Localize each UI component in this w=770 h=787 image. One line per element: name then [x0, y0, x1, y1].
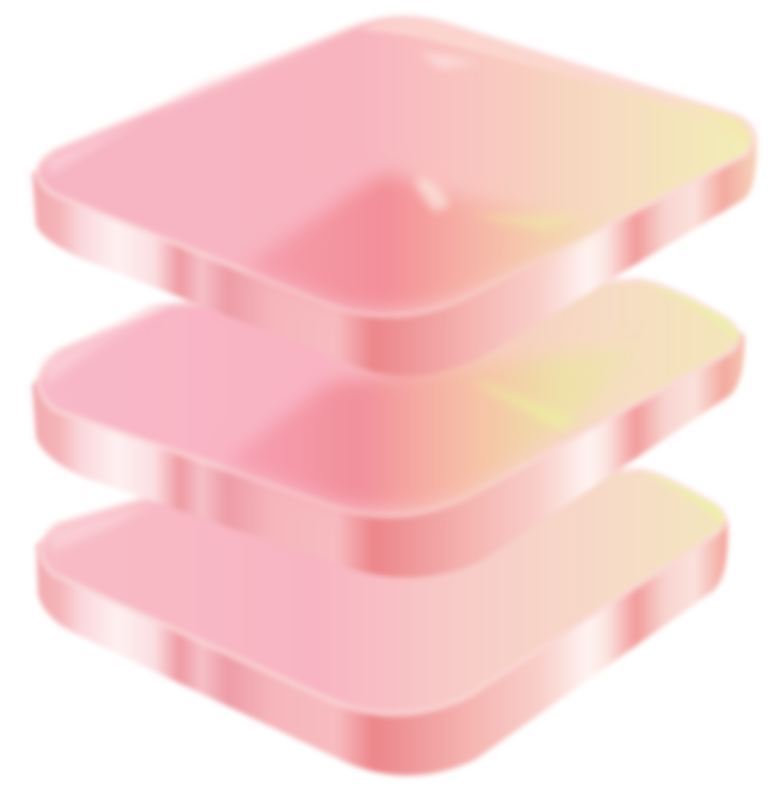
- reflection: top slab: [245, 175, 600, 309]
- rim highlight: top slab back edge: [360, 20, 751, 145]
- slab: top: [32, 17, 757, 376]
- slab: middle: [32, 280, 745, 578]
- reflection: middle slab: [225, 345, 640, 509]
- slab: bottom: [36, 470, 728, 776]
